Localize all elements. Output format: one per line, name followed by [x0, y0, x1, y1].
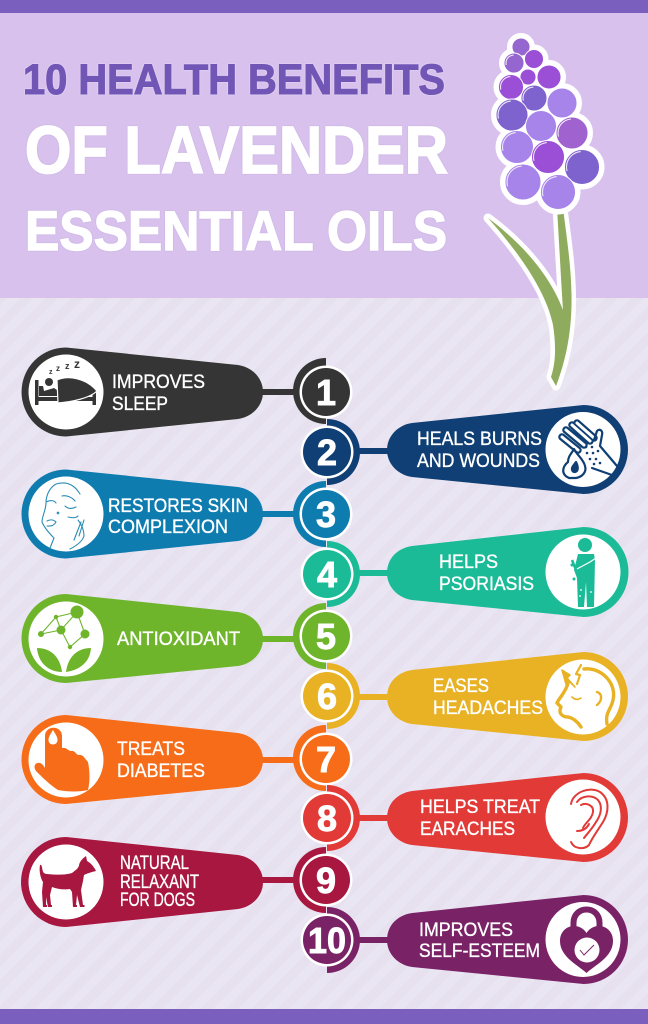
icon: burned hand: [562, 423, 617, 478]
benefit 4: helps psoriasis: HELPS: [439, 551, 498, 573]
benefit 2: heals burns and wounds: 2: [317, 432, 337, 473]
stem and leaf: [488, 208, 572, 386]
benefit 10: improves self-esteem: [300, 895, 628, 984]
benefit 4: helps psoriasis: 4: [317, 554, 337, 595]
top bar: [0, 0, 648, 13]
benefit 1: improves sleep: [22, 348, 352, 436]
benefit 1: improves sleep: 1: [316, 372, 336, 413]
benefit 8: helps treat earaches: HELPS TREAT: [420, 796, 540, 818]
benefit 3: restores skin complexion: [22, 470, 352, 558]
benefit 9: natural relaxant for dogs: [21, 837, 352, 927]
benefit 6: eases headaches: EASES: [433, 675, 489, 697]
benefit 5: antioxidant: 5: [316, 616, 336, 657]
icon: sleeping person in bed: z: [65, 361, 70, 371]
icon: person with psoriasis: [570, 538, 596, 607]
icon: sleeping person in bed: z: [56, 364, 60, 373]
flower buds: [496, 38, 600, 210]
lavender illustration: [488, 38, 600, 386]
benefit 5: antioxidant: [22, 594, 352, 683]
icon: dog silhouette: [40, 856, 96, 907]
benefit 9: natural relaxant for dogs: RELAXANT: [120, 871, 199, 893]
benefit 6: eases headaches: [300, 652, 628, 741]
benefit 2: heals burns and wounds: [300, 405, 628, 494]
icon: woman's face: [42, 483, 84, 549]
benefit 8: helps treat earaches: 8: [317, 798, 337, 839]
benefit 10: improves self-esteem: SELF-ESTEEM: [419, 940, 540, 962]
benefit 10: improves self-esteem: 10: [308, 920, 346, 961]
benefit 6: eases headaches: HEADACHES: [433, 697, 543, 719]
bud highlights: [498, 55, 598, 208]
icon: sleeping person in bed: [35, 357, 97, 405]
icon: heart padlock: [560, 910, 613, 973]
title: 10 HEALTH BENEFITS: [23, 56, 445, 104]
benefit 2: heals burns and wounds: HEALS BURNS: [417, 428, 542, 450]
benefit 9: natural relaxant for dogs: FOR DOGS: [120, 889, 195, 911]
icon: headache head: [557, 665, 614, 727]
title: ESSENTIAL OILS: [25, 199, 447, 262]
benefit 5: antioxidant: ANTIOXIDANT: [117, 628, 240, 650]
benefit 3: restores skin complexion: COMPLEXION: [108, 516, 228, 538]
benefit 4: helps psoriasis: PSORIASIS: [439, 573, 534, 595]
benefit 7: treats diabetes: DIABETES: [117, 760, 205, 782]
benefit 3: restores skin complexion: RESTORES SKIN: [108, 495, 248, 517]
icon: molecule and leaves: [37, 606, 91, 672]
background panel: [0, 298, 648, 1010]
title: [23, 56, 448, 262]
benefit 2: heals burns and wounds: AND WOUNDS: [417, 450, 540, 472]
benefit 7: treats diabetes: 7: [316, 739, 336, 780]
benefit 8: helps treat earaches: [300, 773, 628, 862]
title: OF LAVENDER: [25, 113, 448, 188]
benefit 6: eases headaches: 6: [317, 676, 337, 717]
icon: sleeping person in bed: z: [74, 357, 80, 371]
benefit 1: improves sleep: SLEEP: [112, 393, 168, 415]
benefit 9: natural relaxant for dogs: NATURAL: [120, 852, 189, 874]
header panel: [0, 13, 648, 298]
benefit 1: improves sleep: IMPROVES: [112, 371, 205, 393]
benefit 7: treats diabetes: TREATS: [117, 738, 185, 760]
benefit 3: restores skin complexion: 3: [316, 494, 336, 535]
bottom bar: [0, 1009, 648, 1024]
benefit 9: natural relaxant for dogs: 9: [316, 860, 336, 901]
benefit 4: helps psoriasis: [300, 527, 628, 617]
icon: sleeping person in bed: z: [49, 369, 53, 376]
flower silhouette: [496, 38, 600, 210]
benefit 7: treats diabetes: [22, 715, 352, 804]
icon: finger with blood drop: [35, 728, 90, 792]
benefit 8: helps treat earaches: EARACHES: [420, 818, 515, 840]
benefit 10: improves self-esteem: IMPROVES: [419, 919, 513, 941]
icon: ear: [571, 790, 608, 848]
